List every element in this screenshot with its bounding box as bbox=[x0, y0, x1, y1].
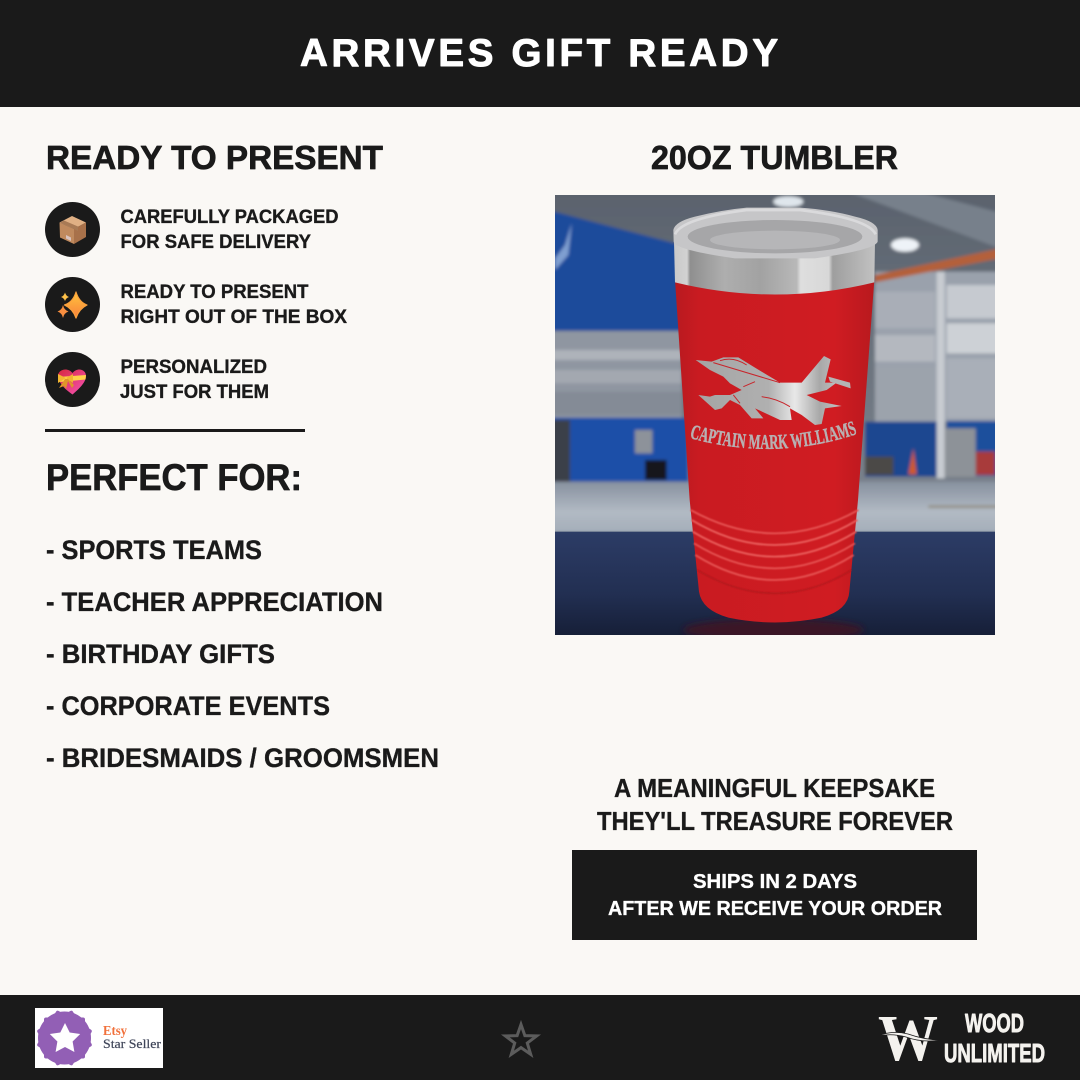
text: wood: WOOD bbox=[965, 1008, 1024, 1038]
clear lid bbox=[673, 208, 878, 258]
badge: etsy star seller bbox=[35, 1008, 163, 1068]
text: right out of the box: RIGHT OUT OF THE BOX bbox=[120, 307, 347, 328]
header banner bbox=[0, 0, 1080, 107]
text: ships in 2 days: SHIPS IN 2 DAYS bbox=[693, 871, 857, 893]
title: ARRIVES GIFT READY bbox=[300, 32, 778, 75]
icon: sparkles bbox=[45, 277, 100, 332]
tumbler: CAPTAIN MARK WILLIAMS bbox=[691, 421, 856, 450]
feature: personalized bbox=[45, 352, 269, 407]
engraved name bbox=[689, 433, 861, 449]
list item: corporate events: - CORPORATE EVENTS bbox=[46, 691, 330, 721]
tumbler bbox=[673, 208, 878, 635]
text: carefully packaged: CAREFULLY PACKAGED bbox=[120, 207, 338, 228]
list item: birthday gifts: - BIRTHDAY GIFTS bbox=[46, 639, 275, 669]
tumbler ribs bbox=[691, 510, 858, 593]
text: ready to present: READY TO PRESENT bbox=[120, 282, 309, 303]
icon: package bbox=[45, 202, 100, 257]
icon: outline star bbox=[505, 1024, 537, 1054]
list item: bridesmaids and groomsmen: - BRIDESMAIDS / GROOMSMEN bbox=[46, 743, 439, 773]
text: for safe delivery: FOR SAFE DELIVERY bbox=[120, 232, 311, 253]
table top bbox=[555, 532, 995, 635]
text: personalized: PERSONALIZED bbox=[120, 357, 267, 378]
logo mark: W: W bbox=[878, 1002, 938, 1075]
keepsake message bbox=[597, 773, 953, 836]
list item: sports teams: - SPORTS TEAMS bbox=[46, 535, 262, 565]
heading: 20oz tumbler: 20OZ TUMBLER bbox=[651, 139, 898, 176]
text: after we receive your order: AFTER WE RECEIVE YOUR ORDER bbox=[608, 898, 943, 920]
heading: ready to present: READY TO PRESENT bbox=[46, 139, 383, 176]
panel: perfect for bbox=[46, 457, 439, 773]
panel: ready to present bbox=[45, 139, 383, 407]
steel band bbox=[674, 242, 875, 294]
tumbler reflection bbox=[683, 618, 864, 635]
text: they'll treasure forever: THEY'LL TREASURE FOREVER bbox=[597, 806, 953, 836]
shipping callout bbox=[572, 850, 977, 940]
text: a meaningful keepsake: A MEANINGFUL KEEPSAKE bbox=[614, 773, 935, 803]
hangar background bbox=[555, 195, 995, 532]
text: just for them: JUST FOR THEM bbox=[120, 382, 269, 403]
icon: purple seal with star bbox=[36, 1010, 93, 1066]
list item: teacher appreciation: - TEACHER APPRECIATION bbox=[46, 587, 383, 617]
feature: ready to present bbox=[45, 277, 347, 332]
text: etsy: Etsy bbox=[103, 1024, 127, 1039]
heading: perfect for: PERFECT FOR: bbox=[46, 457, 302, 498]
footer bar bbox=[0, 995, 1080, 1080]
text: star seller: Star Seller bbox=[103, 1036, 162, 1051]
feature: carefully packaged bbox=[45, 202, 338, 257]
icon: heart with ribbon bbox=[45, 352, 100, 407]
engraved jet bbox=[696, 356, 851, 425]
product photo bbox=[555, 195, 995, 635]
logo: wood unlimited bbox=[878, 1002, 1045, 1075]
tumbler body bbox=[675, 280, 874, 622]
